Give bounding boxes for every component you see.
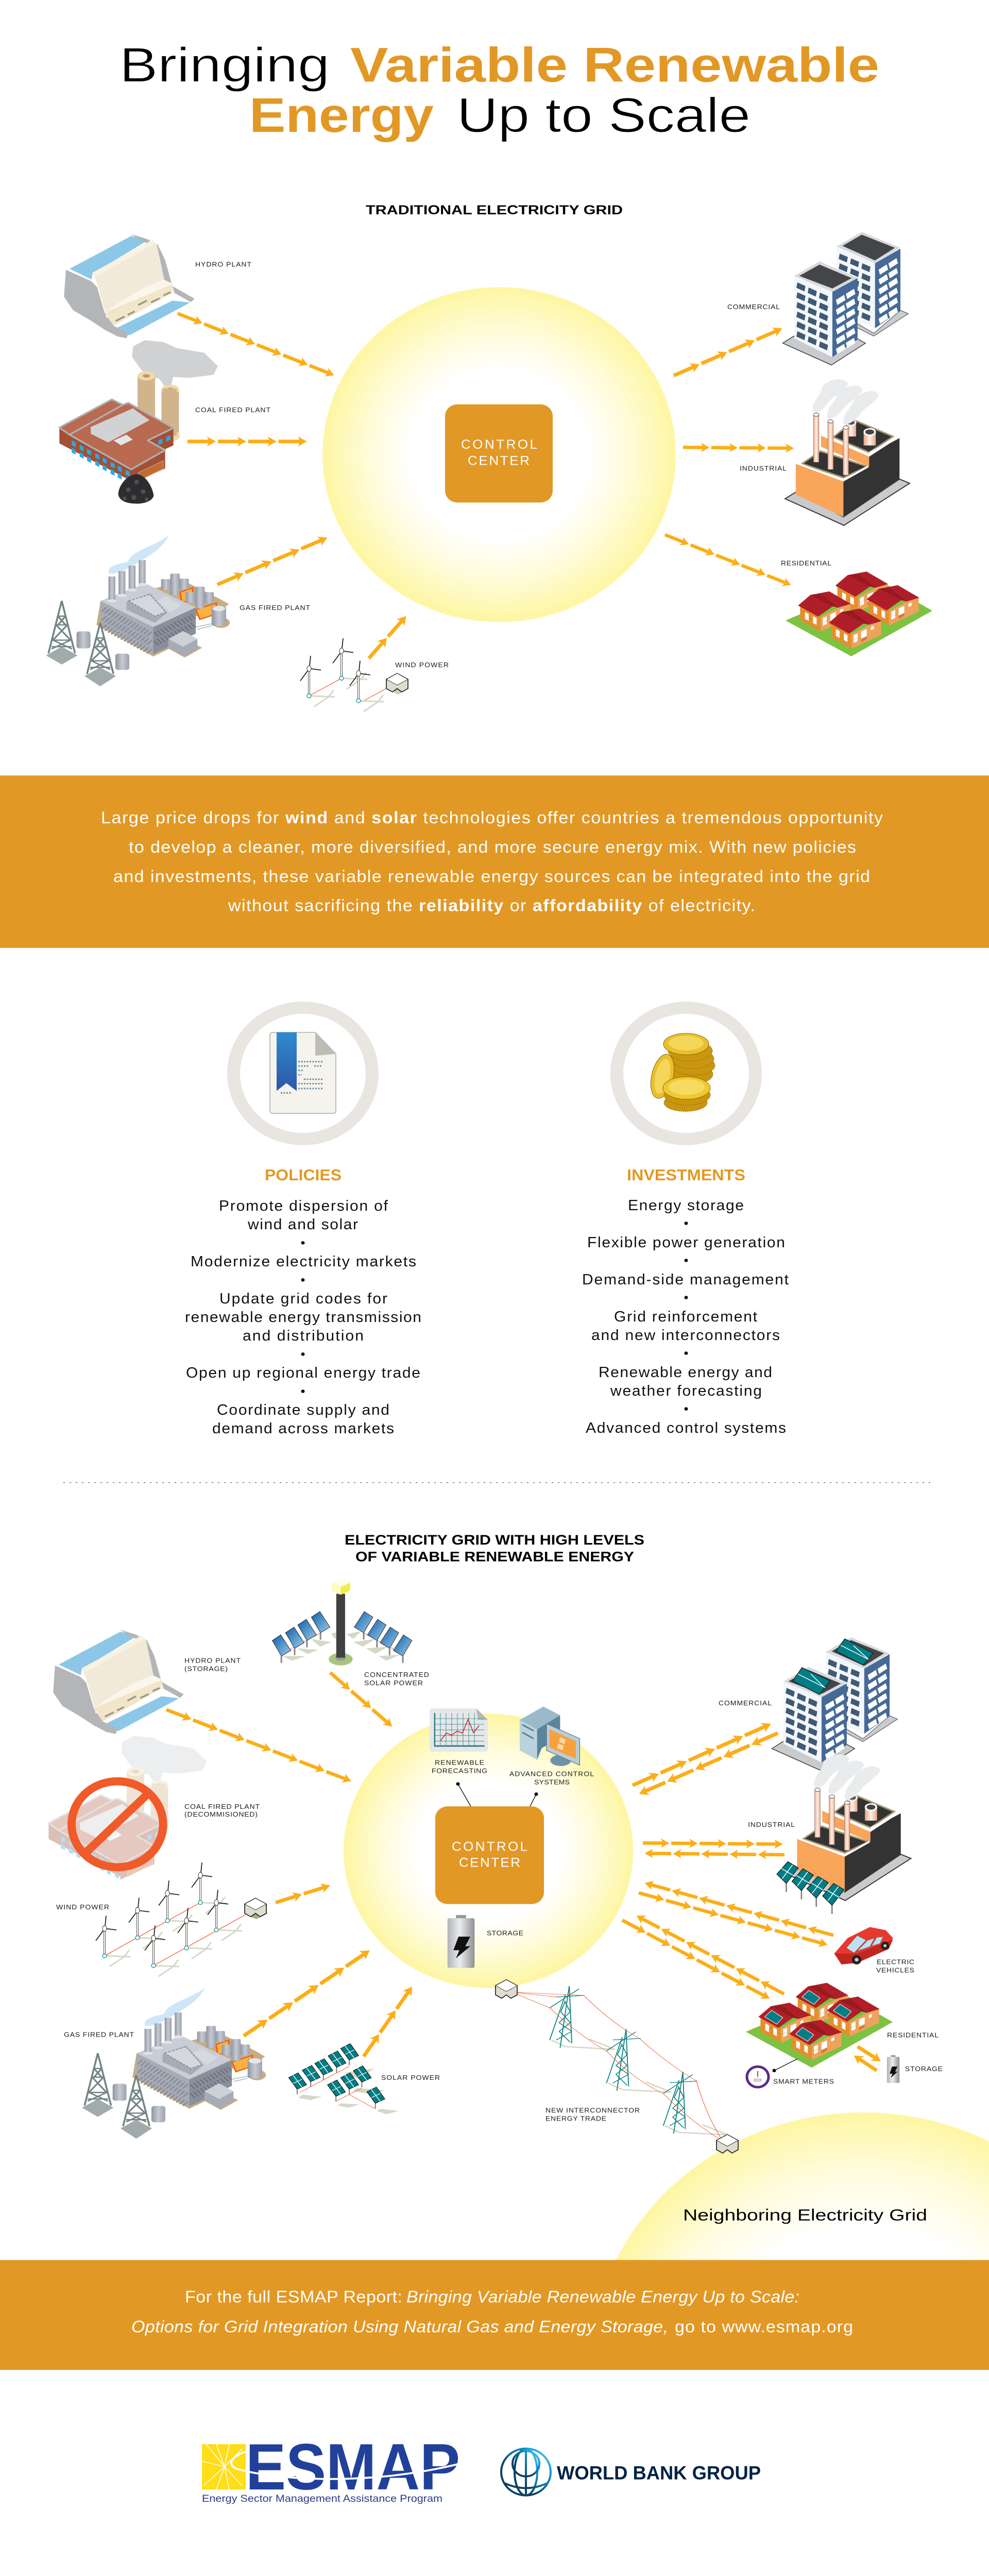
icon: coal fired plant (59, 341, 217, 504)
heading: high VRE grid: OF VARIABLE RENEWABLE ENERGY (355, 1549, 634, 1564)
arrow: grid to commercial (672, 324, 785, 380)
heading: traditional electricity grid: TRADITIONAL ELECTRICITY GRID (366, 204, 623, 217)
icon: gas fired plant (82, 1988, 266, 2139)
heading: high VRE grid: ELECTRICITY GRID WITH HIGH LEVELS (345, 1532, 644, 1548)
panel: report banner (0, 2260, 989, 2370)
arrow: vehicles to grid (643, 1878, 835, 1940)
label: new interconnector energy trade: NEW INTERCONNECTOR (545, 2107, 640, 2114)
title (120, 38, 879, 142)
banner line 1 (185, 2288, 799, 2307)
list: investments: Renewable energy and (599, 1365, 772, 1381)
label: electric vehicles: VEHICLES (876, 1967, 914, 1974)
label: wind power: WIND POWER (395, 661, 449, 669)
title line 1: Bringing (120, 38, 330, 92)
label: gas fired plant: GAS FIRED PLANT (64, 2031, 134, 2038)
label: renewable forecasting: FORECASTING (432, 1767, 487, 1775)
icon: industrial with solar (777, 1754, 911, 1914)
label: renewable forecasting (432, 1759, 487, 1775)
icon: industrial (785, 379, 910, 526)
arrow: grid to industrial (683, 443, 794, 453)
label: wind power: WIND POWER (56, 1903, 109, 1911)
icon: home storage battery (887, 2055, 899, 2083)
label: residential: RESIDENTIAL (781, 560, 831, 567)
label: electric vehicles: ELECTRIC (877, 1958, 914, 1965)
label: concentrated solar power: SOLAR POWER (364, 1679, 423, 1687)
label: concentrated solar power: CONCENTRATED (364, 1671, 429, 1679)
title line 1: Variable Renewable (350, 38, 879, 92)
arrow: storage to homes (851, 2052, 880, 2075)
banner text: to develop a cleaner, more diversified, and more secure energy mix. With new policies (129, 838, 856, 857)
banner text: Large price drops for wind and solar technologies offer countries a tremendous opportunity (101, 809, 883, 827)
arrow: csp to grid (327, 1669, 396, 1730)
list: investments: and new interconnectors (591, 1328, 780, 1344)
arrow: coal to grid (187, 436, 307, 446)
arrow: hydro to grid (164, 1705, 353, 1786)
label: new interconnector energy trade: ENERGY TRADE (545, 2115, 606, 2123)
grid glow circle (344, 1714, 633, 1988)
list: policies: renewable energy transmission (185, 1310, 421, 1326)
arrow: industrial to grid (644, 1849, 785, 1859)
label: gas fired plant: GAS FIRED PLANT (240, 604, 311, 612)
leader: smart meter to homes (773, 2059, 797, 2072)
arrow: gas to grid (241, 1946, 373, 2040)
banner line 2: Options for Grid Integration Using Natural Gas and Energy Storage, (131, 2318, 668, 2336)
list: investments: weather forecasting (610, 1383, 762, 1399)
list: investments: Advanced control systems (586, 1420, 786, 1436)
list: investments (582, 1197, 789, 1436)
banner line 1: Bringing Variable Renewable Energy Up to Scale: (406, 2288, 799, 2307)
panel: policies (185, 1008, 421, 1437)
label: home storage: STORAGE (905, 2065, 943, 2073)
list: policies: Coordinate supply and (217, 1402, 389, 1418)
label: coal fired plant decommissioned: COAL FIRED PLANT (184, 1803, 260, 1810)
arrow: homes to storage (855, 2043, 883, 2065)
heading: high VRE grid (345, 1532, 644, 1564)
icon: wind farm (96, 1862, 268, 1976)
icon: hydro plant storage (53, 1630, 184, 1734)
icon: solar farm (288, 2044, 399, 2114)
icon: commercial with rooftop solar (772, 1637, 897, 1770)
icon: electric vehicle (834, 1927, 893, 1964)
label: hydro plant storage: (STORAGE) (184, 1665, 228, 1673)
grid glow circle (322, 287, 676, 622)
icon: transmission pylons and interconnector (496, 1980, 738, 2153)
label: coal fired plant decommissioned: (DECOMMISIONED) (184, 1810, 258, 1818)
list: investments: Demand-side management (582, 1272, 789, 1288)
control center (435, 1806, 544, 1904)
arrow: wind to grid (274, 1881, 332, 1907)
arrow: wind to grid (365, 613, 410, 662)
label: industrial: INDUSTRIAL (740, 465, 787, 472)
list: policies: and distribution (243, 1328, 364, 1344)
control center (445, 404, 553, 502)
arrow: hydro to grid (176, 309, 336, 380)
icon: concentrated solar power (272, 1579, 412, 1666)
label: commercial: COMMERCIAL (719, 1699, 772, 1707)
arrow: residential to grid (634, 1911, 787, 1998)
label: coal fired plant: COAL FIRED PLANT (195, 406, 271, 414)
heading: investments: INVESTMENTS (627, 1166, 745, 1184)
icon: residential (786, 571, 932, 656)
label: solar power: SOLAR POWER (381, 2074, 440, 2081)
panel: high VRE grid diagram (48, 1579, 989, 2260)
control center: CONTROL (452, 1840, 527, 1854)
label: hydro plant storage: HYDRO PLANT (184, 1657, 241, 1664)
arrow: grid to vehicles (637, 1888, 829, 1950)
icon: renewable forecasting chart (430, 1708, 488, 1752)
control center: CONTROL (461, 438, 537, 452)
banner text: and investments, these variable renewable energy sources can be integrated into the grid (113, 868, 870, 886)
leader: computer to control (530, 1792, 538, 1806)
label: storage: STORAGE (487, 1929, 523, 1937)
label: smart meters: SMART METERS (773, 2078, 834, 2085)
title line 2 (249, 88, 751, 142)
icon: residential with solar (746, 1983, 893, 2067)
label: hydro plant storage (184, 1657, 241, 1673)
list: policies (185, 1198, 421, 1437)
list: policies: Promote dispersion of (219, 1198, 388, 1214)
label: hydro plant: HYDRO PLANT (195, 261, 252, 268)
logo: World Bank Group (501, 2449, 761, 2496)
label: industrial: INDUSTRIAL (748, 1821, 795, 1828)
panel: opportunity banner (0, 775, 989, 948)
arrow: grid to commercial (630, 1719, 773, 1790)
icon: decommissioned coal plant (48, 1737, 206, 1879)
list: policies: demand across markets (212, 1421, 394, 1437)
icon: hydro plant (64, 234, 195, 338)
list: investments: Energy storage (628, 1197, 744, 1214)
panel: traditional grid diagram (46, 232, 932, 711)
label: advanced control systems (509, 1770, 594, 1786)
logo: World Bank Group: WORLD BANK GROUP (557, 2463, 761, 2484)
label: renewable forecasting: RENEWABLE (435, 1759, 484, 1767)
list: policies: Open up regional energy trade (186, 1365, 420, 1381)
leader: forecasting to control (456, 1782, 471, 1806)
control center: CENTER (459, 1856, 520, 1870)
arrow: grid to residential (663, 531, 793, 589)
list: policies: wind and solar (247, 1216, 358, 1233)
icon: smart meter (747, 2066, 769, 2087)
label: new interconnector energy trade (545, 2107, 640, 2123)
banner text (101, 809, 883, 916)
list: investments: Grid reinforcement (614, 1309, 757, 1325)
label: commercial: COMMERCIAL (727, 303, 780, 311)
list: policies: Update grid codes for (219, 1291, 387, 1307)
control center: CENTER (468, 454, 530, 468)
banner line 2: go to www.esmap.org (675, 2318, 853, 2336)
icon: policy document (234, 1008, 372, 1139)
arrow: grid to industrial (643, 1838, 783, 1849)
label: coal fired plant decommissioned (184, 1803, 260, 1818)
title line 2: Energy (249, 88, 434, 142)
panel: investments (582, 1008, 789, 1436)
heading: policies: POLICIES (265, 1166, 342, 1184)
label: residential: RESIDENTIAL (887, 2031, 939, 2039)
icon: gas fired plant (46, 535, 230, 686)
logo: ESMAP: Energy Sector Management Assistance Program (202, 2493, 442, 2504)
label: concentrated solar power (364, 1671, 429, 1687)
label: electric vehicles (876, 1958, 914, 1974)
icon: commercial buildings (783, 232, 908, 365)
logo: ESMAP: ESMAP (246, 2430, 460, 2503)
list: investments: Flexible power generation (587, 1235, 785, 1251)
icon: advanced control computer (520, 1706, 579, 1766)
title line 2: Up to Scale (457, 88, 751, 142)
banner text: without sacrificing the reliability or affordability of electricity. (228, 897, 755, 916)
list: policies: Modernize electricity markets (191, 1253, 416, 1270)
arrow: solar to grid (360, 1984, 416, 2059)
arrow: grid to residential (620, 1916, 772, 2003)
icon: storage battery (448, 1915, 474, 1968)
label: advanced control systems: SYSTEMS (534, 1778, 570, 1786)
banner line 1: For the full ESMAP Report: (185, 2288, 402, 2307)
label: advanced control systems: ADVANCED CONTROL (509, 1770, 594, 1777)
arrow: commercial to grid (637, 1728, 780, 1799)
label: neighboring electricity grid: Neighboring Electricity Grid (683, 2206, 927, 2224)
arrow: gas to grid (215, 533, 330, 589)
title line 1 (120, 38, 879, 92)
neighboring grid circle (616, 2112, 989, 2260)
icon: gold coins (617, 1008, 755, 1139)
icon: wind power (300, 638, 408, 711)
